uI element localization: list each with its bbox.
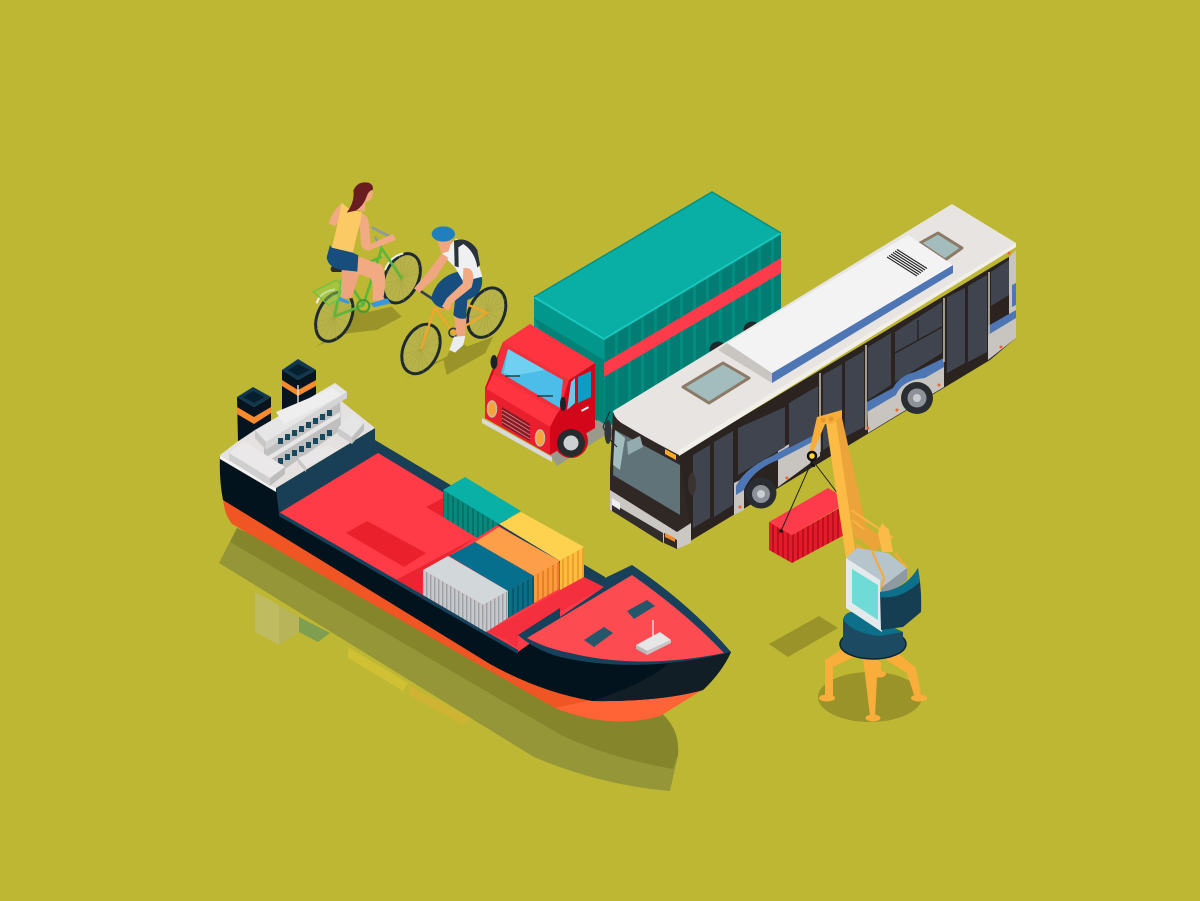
man rider <box>414 226 482 353</box>
container side with ribs <box>604 233 781 430</box>
crane boom <box>808 410 907 568</box>
hull: orange waterline <box>223 480 705 721</box>
container: white <box>423 556 508 632</box>
red container <box>769 461 850 563</box>
ship <box>220 359 731 721</box>
ground base <box>550 420 613 466</box>
windows <box>693 260 1009 528</box>
man's bicycle <box>394 282 513 380</box>
wheels <box>746 382 933 508</box>
marker lights <box>738 252 1010 508</box>
rear wall and side rim <box>276 428 605 640</box>
hull: black side <box>220 455 731 701</box>
cyclists <box>308 182 513 381</box>
dark body band and side <box>677 255 1016 549</box>
rear grey panel <box>988 318 1016 360</box>
roof skylights <box>683 363 749 403</box>
hull: bow waterline highlight <box>555 689 704 721</box>
crane base <box>840 612 906 659</box>
woman rider <box>327 182 396 307</box>
window frames <box>895 320 942 353</box>
container: orange <box>475 527 560 603</box>
container: green <box>443 477 521 538</box>
front <box>603 411 696 549</box>
fore deck strip <box>487 577 604 648</box>
ground shadows <box>316 307 493 381</box>
funnel left <box>237 387 271 442</box>
bus <box>603 204 1016 549</box>
cab <box>482 324 595 462</box>
container: blue <box>449 542 534 618</box>
funnel right <box>282 359 316 410</box>
truck rear wheels <box>708 320 762 360</box>
ground shadow of container <box>769 616 838 657</box>
superstructure deck <box>220 400 375 488</box>
crane cabin <box>846 548 921 632</box>
front base <box>610 412 692 549</box>
ground shadow of crane <box>818 672 922 722</box>
crane <box>769 410 927 722</box>
roof <box>613 204 1016 455</box>
truck <box>482 192 781 466</box>
main deck <box>279 453 605 652</box>
superstructure <box>229 383 364 486</box>
middle grey panel <box>867 360 944 433</box>
roof AC unit <box>718 235 953 383</box>
container roof <box>534 192 781 339</box>
front grey panel <box>778 428 820 487</box>
container stripe <box>604 258 781 377</box>
ship reflection <box>219 528 678 791</box>
forecastle <box>518 565 731 665</box>
container: yellow <box>499 512 584 590</box>
door posts <box>820 272 989 452</box>
woman's bicycle <box>308 227 428 347</box>
crane legs <box>819 645 927 722</box>
container front <box>534 297 604 430</box>
